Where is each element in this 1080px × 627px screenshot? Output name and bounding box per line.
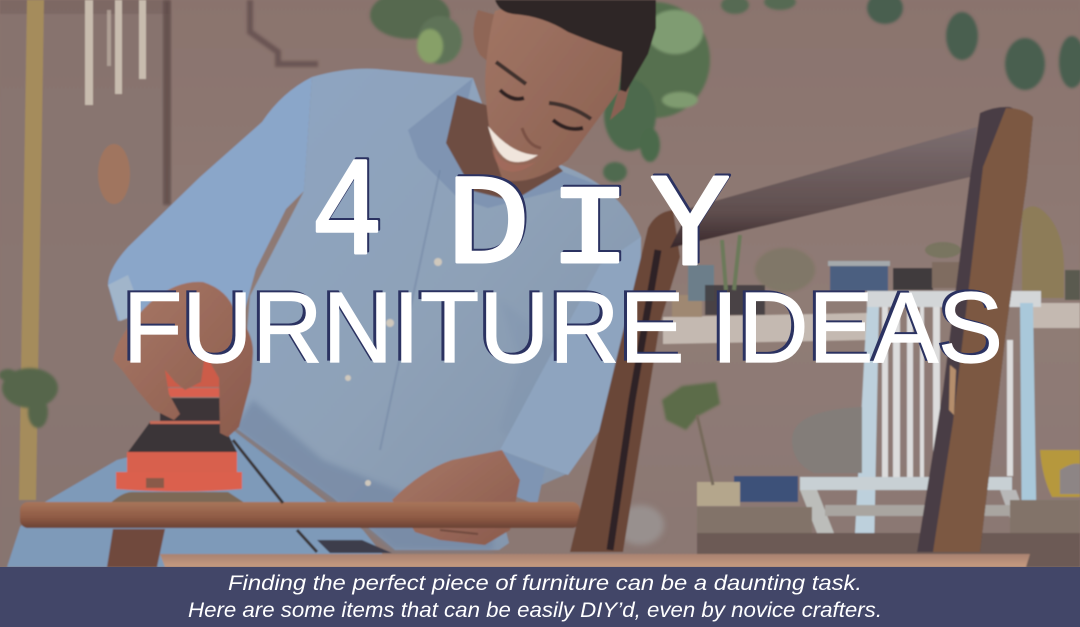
man: head [446,0,656,201]
title shadow: Y [652,152,732,302]
mouth [488,126,538,162]
caption band [0,567,1080,627]
orbital sander [108,351,248,511]
collar [408,78,598,208]
shelf with pots [663,206,1080,344]
title shadow [313,135,732,302]
sleeve [108,77,312,321]
left hand over the sander [113,282,253,437]
eyebrows [496,62,591,119]
torso [233,69,641,550]
top rail [670,127,977,248]
caption line 2: Here are some items that can be easily DIY’d, even by novice crafters. [188,599,882,622]
wooden chair frame [160,107,1033,567]
title shadow: 4 [313,135,385,294]
nose [522,128,541,148]
caption line 1: Finding the perfect piece of furniture can be a daunting task. [228,572,862,595]
white slatted chair [800,291,1044,566]
buttons [345,258,442,486]
foliage [370,0,1080,182]
yellow pole [19,0,44,500]
wood work piece [20,502,580,567]
right sleeve [500,237,641,475]
title letters [311,137,730,304]
man: body and shirt [7,69,641,567]
title letters: Y [650,154,730,304]
front left leg [570,210,680,552]
right post [917,107,1033,552]
jeans [7,430,393,567]
power cord [233,440,317,552]
face [485,0,624,181]
title shadow: D [448,154,532,299]
eyes [500,90,583,129]
neck [446,95,563,201]
ear [473,10,496,65]
title letters: 4 [311,137,383,296]
sanding disc [108,492,248,511]
title shadow: I [551,167,633,294]
left plant [0,368,58,428]
title: 4 DIY [311,135,732,304]
bottom plank [160,554,1030,567]
title: FURNITURE IDEAS: FURNITURE IDEAS [123,272,1003,384]
title letters: I [549,169,631,296]
title letters: D [446,156,530,301]
right ear [610,84,630,120]
right hand [392,450,520,545]
wind chimes [85,0,146,105]
hair [495,0,656,92]
title: FURNITURE IDEAS: FURNITURE IDEAS [120,270,1000,382]
garden pots and table [616,382,1080,567]
